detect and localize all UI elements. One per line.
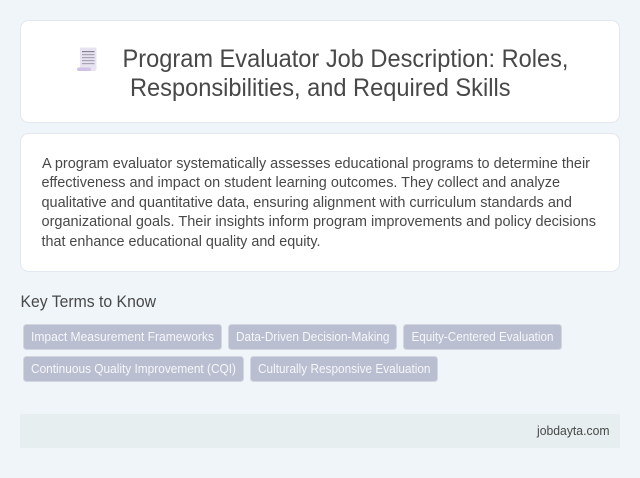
text block: description: that enhance educational quality and equity. <box>42 234 320 250</box>
text block: description: effectiveness and impact on student learning outcomes. They collect and analyze <box>42 175 560 191</box>
tag: equity-centered evaluation <box>404 324 562 350</box>
tag: continuous quality improvement: Continuous Quality Improvement (CQI) <box>31 362 236 376</box>
title <box>122 45 568 102</box>
tag: culturally responsive evaluation <box>250 356 438 382</box>
heading: key terms: Key Terms to Know <box>20 292 157 311</box>
tag: equity-centered evaluation: Equity-Centered Evaluation <box>412 330 554 344</box>
tag: impact measurement frameworks: Impact Measurement Frameworks <box>31 330 214 344</box>
text block: description: organizational goals. Their insights inform program improvements and policy decisions <box>42 214 596 230</box>
icon: document scroll <box>77 48 96 71</box>
title: Program Evaluator Job Description: Roles, <box>122 45 568 73</box>
title: Responsibilities, and Required Skills <box>130 74 510 102</box>
tag list <box>24 324 562 382</box>
panel: description card <box>20 134 620 272</box>
text block: description: qualitative and quantitative data, ensuring alignment with curriculum standards and <box>42 195 572 211</box>
footer: site name: jobdayta.com <box>536 424 610 438</box>
tag: culturally responsive evaluation: Culturally Responsive Evaluation <box>258 362 430 376</box>
tag: data-driven decision-making: Data-Driven Decision-Making <box>236 330 390 344</box>
tag: impact measurement frameworks <box>24 324 222 350</box>
tag: continuous quality improvement <box>24 356 244 382</box>
text block: description <box>42 156 596 250</box>
panel: title card <box>20 20 620 122</box>
footer bar <box>20 414 620 448</box>
tag: data-driven decision-making <box>228 324 396 350</box>
text block: description: A program evaluator systematically assesses educational programs to determine their <box>42 156 590 172</box>
